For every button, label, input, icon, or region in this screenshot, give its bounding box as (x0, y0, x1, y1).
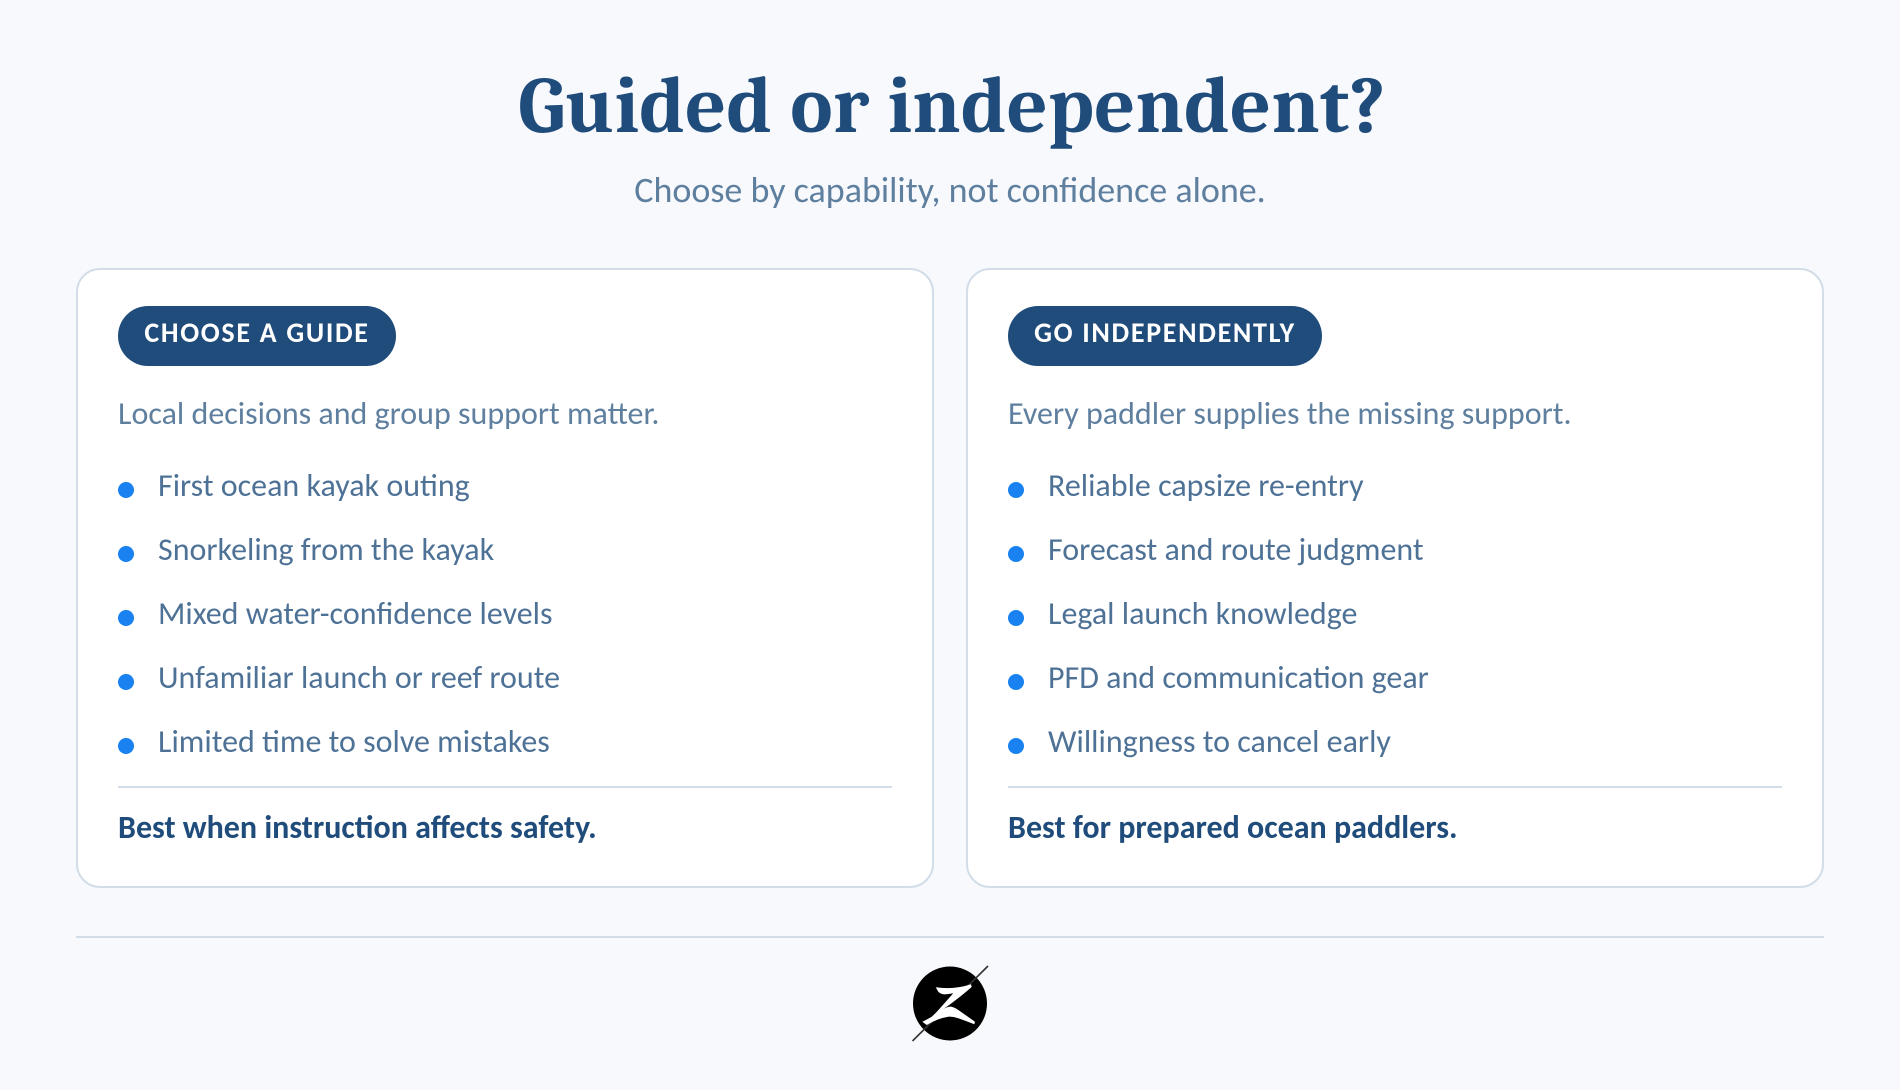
badge: go independently: GO INDEPENDENTLY (1034, 315, 1296, 350)
subtitle: Choose by capability, not confidence alone. (634, 168, 1266, 212)
badge: choose a guide: CHOOSE A GUIDE (144, 315, 370, 350)
bullet: snorkeling from the kayak: Snorkeling from the kayak (158, 530, 494, 569)
panel: choose a guide (76, 268, 934, 888)
panel: go independently (966, 268, 1824, 888)
panel intro text: Every paddler supplies the missing support. (1008, 394, 1572, 433)
icon: Z logo (912, 965, 988, 1042)
bullet: legal launch knowledge: Legal launch knowledge (1048, 594, 1357, 633)
bullet: first ocean kayak outing: First ocean kayak outing (158, 466, 470, 505)
title: Guided or independent? (518, 60, 1386, 152)
badge: choose a guide (118, 306, 396, 366)
panel takeaway: Best when instruction affects safety. (118, 808, 597, 847)
bullet: willingness to cancel early: Willingness to cancel early (1048, 722, 1391, 761)
bullet: forecast and route judgment: Forecast and route judgment (1048, 530, 1424, 569)
bullet: pfd and communication gear: PFD and communication gear (1048, 658, 1429, 697)
bullet: reliable capsize re-entry: Reliable capsize re-entry (1048, 466, 1364, 505)
bullet: unfamiliar launch or reef route: Unfamiliar launch or reef route (158, 658, 560, 697)
bullet: limited time to solve mistakes: Limited time to solve mistakes (158, 722, 550, 761)
panel intro text: Local decisions and group support matter. (118, 394, 659, 433)
panel takeaway: Best for prepared ocean paddlers. (1008, 808, 1458, 847)
badge: go independently (1008, 306, 1322, 366)
bullet: mixed water-confidence levels: Mixed water-confidence levels (158, 594, 553, 633)
